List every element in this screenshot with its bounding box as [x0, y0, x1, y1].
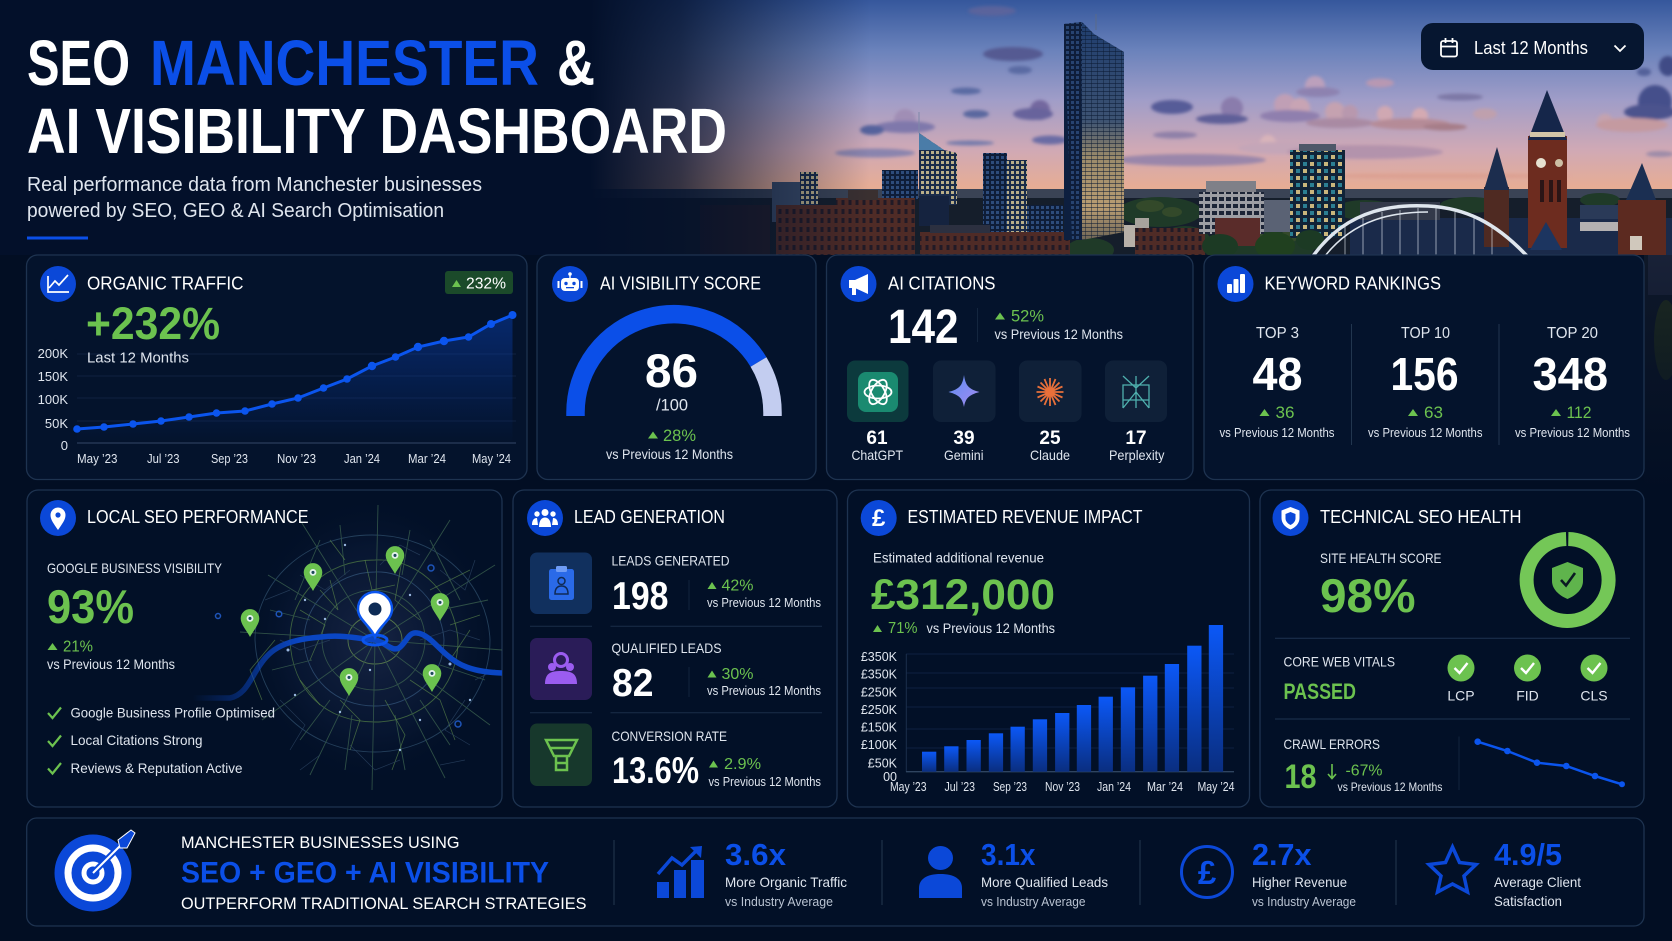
metric: qualified leads: [530, 638, 821, 705]
check: CLS: CLS: [1580, 688, 1608, 704]
Beetham tower: [1064, 14, 1124, 240]
panel: keyword rankings: [1204, 255, 1644, 480]
text: outperform: OUTPERFORM TRADITIONAL SEARCH STRATEGIES: [181, 894, 586, 913]
icon: clipboard: [549, 566, 574, 600]
tile: Claude: 25: [1039, 428, 1061, 449]
metric: conversion rate: [530, 724, 821, 791]
line chart: traffic: 150K: [38, 369, 68, 384]
panel: summary banner: [27, 818, 1644, 926]
metric: qualified leads: 82: [612, 662, 654, 705]
metric: qualified leads: QUALIFIED LEADS: [612, 640, 722, 656]
metric: top 10: 156: [1390, 348, 1458, 400]
icon: pound: £: [872, 505, 886, 532]
stat: client satisfaction: [1429, 837, 1581, 909]
bar chart: revenue: May ’23: [890, 780, 927, 794]
metric: top 20: 348: [1532, 348, 1608, 400]
line chart: traffic: May ’23: [77, 451, 118, 466]
comparison note: vs Previous 12 Months: [47, 656, 175, 672]
stat: client satisfaction: Average Client: [1494, 874, 1581, 890]
comparison note: vs Previous 12 Months: [606, 446, 733, 462]
checklist: Google Business Profile Optimised: [70, 704, 275, 720]
line chart: traffic: Sep ’23: [211, 451, 248, 466]
bar chart: revenue: Mar ’24: [1147, 780, 1183, 794]
heading: organic traffic: ORGANIC TRAFFIC: [87, 274, 244, 294]
distance and ground: [590, 189, 1672, 200]
metric: qualified leads: 30%: [722, 666, 754, 683]
metric: qualified leads: vs Previous 12 Months: [707, 684, 821, 698]
metric: leads generated: LEADS GENERATED: [612, 553, 730, 569]
comparison note: vs Previous 12 Months: [994, 326, 1123, 342]
change: 71%: vs Previous 12 Months: [926, 620, 1055, 636]
metric: top 10: 63: [1424, 403, 1443, 422]
icon: robot: [552, 266, 588, 302]
check: FID: FID: [1516, 688, 1539, 704]
title: &: [557, 27, 595, 99]
label: additional revenue: Estimated additional revenue: [873, 550, 1044, 566]
icon: person: [919, 846, 962, 898]
stat: qualified leads multiple: 3.1x: [981, 837, 1036, 872]
date range selector: Last 12 Months: [1474, 38, 1588, 58]
metric: top 3: 48: [1252, 348, 1302, 400]
tile: Perplexity: Perplexity: [1109, 447, 1164, 463]
stat: organic traffic multiple: 3.6x: [725, 837, 787, 872]
icon: pound circle: [1182, 846, 1232, 898]
tile: ChatGPT: [847, 360, 908, 463]
heading: AI visibility score: AI VISIBILITY SCORE: [600, 274, 761, 294]
sparkline: crawl errors: [1474, 738, 1625, 787]
panel: technical SEO health: [1260, 490, 1644, 807]
stat: organic traffic multiple: vs Industry Average: [725, 895, 833, 909]
metric: top 3: vs Previous 12 Months: [1220, 426, 1334, 440]
bar chart: revenue: Sep ’23: [993, 780, 1027, 794]
crawl errors: 18: [1284, 758, 1316, 796]
metric: conversion rate: vs Previous 12 Months: [708, 775, 821, 789]
date range selector: [1421, 23, 1644, 70]
line chart: traffic: 50K: [45, 416, 68, 431]
bar chart: revenue: Nov ’23: [1045, 780, 1080, 794]
icon: pound circle: £: [1198, 854, 1217, 891]
tile: Claude: Claude: [1030, 447, 1070, 463]
title: AI VISIBILITY DASHBOARD: [27, 95, 727, 167]
change: 71%: 71%: [888, 620, 918, 637]
heading: estimated revenue impact: ESTIMATED REVENUE IMPACT: [908, 507, 1143, 527]
panel: AI citations: [826, 255, 1193, 480]
clouds: [835, 6, 1672, 178]
title: [27, 27, 727, 167]
line chart: traffic: Jan ’24: [344, 451, 380, 466]
stat: qualified leads multiple: More Qualified Leads: [981, 874, 1108, 890]
icon: people purple: [545, 654, 577, 684]
tile: Perplexity: [1105, 360, 1167, 463]
subtitle: Real performance data from Manchester businesses: [27, 173, 482, 196]
line chart: traffic: Mar ’24: [408, 451, 446, 466]
heading: local SEO performance: LOCAL SEO PERFORMANCE: [87, 507, 308, 527]
bar chart: revenue: £250K: [861, 686, 898, 700]
metric: conversion rate: 13.6%: [612, 750, 699, 791]
core web vitals: CORE WEB VITALS: [1284, 654, 1395, 670]
change: 28%: 28%: [663, 426, 696, 445]
heading: keyword rankings: KEYWORD RANKINGS: [1264, 274, 1441, 294]
metric: top 3: 36: [1276, 403, 1294, 422]
tile: Gemini: 39: [953, 428, 975, 449]
subtitle: powered by SEO, GEO & AI Search Optimisation: [27, 199, 444, 222]
icon: calendar: [1441, 38, 1457, 56]
stat: qualified leads multiple: [919, 837, 1108, 909]
metric: top 20: 112: [1566, 403, 1592, 422]
stat: organic traffic multiple: More Organic Traffic: [725, 874, 847, 890]
river: [193, 633, 502, 698]
metric: top 3: [1220, 325, 1334, 440]
icon: rising bars: [657, 846, 704, 898]
metric: top 10: [1368, 325, 1482, 440]
badge: 232%: [445, 271, 513, 294]
stat: revenue multiple: 2.7x: [1252, 837, 1312, 872]
buildings right with clock tower: [1350, 90, 1672, 256]
bar chart: revenue: May ’24: [1198, 780, 1235, 794]
metric: top 20: TOP 20: [1547, 325, 1598, 342]
title: MANCHESTER: [150, 27, 539, 99]
text: manchester businesses: MANCHESTER BUSINESSES USING: [181, 833, 460, 852]
icon: star: [1429, 847, 1476, 892]
change: 52%: [995, 307, 1044, 326]
metric: top 3: TOP 3: [1256, 325, 1299, 342]
gauge: 86 of 100: [575, 314, 773, 416]
icon: shield: [1272, 500, 1308, 536]
big stat: +232%: +232%: [86, 298, 220, 349]
line chart: traffic: 0: [61, 438, 68, 453]
line chart: traffic: Jul ’23: [147, 451, 180, 466]
icon: pound: [861, 500, 897, 536]
right strip below the skyline: [1644, 255, 1672, 495]
badge: 232%: 232%: [466, 275, 506, 292]
metric: top 20: [1515, 325, 1630, 440]
line chart: traffic: [38, 311, 516, 466]
stat: revenue multiple: Higher Revenue: [1252, 874, 1347, 890]
stat: qualified leads multiple: vs Industry Average: [981, 895, 1086, 909]
big stat: 142: 142: [888, 301, 958, 354]
stat: organic traffic multiple: [657, 837, 847, 909]
icon: megaphone: [840, 266, 876, 302]
icon: funnel: [546, 740, 577, 770]
tile: Claude: [1019, 360, 1082, 463]
metric: conversion rate: CONVERSION RATE: [612, 728, 727, 744]
core web vitals: [1284, 654, 1608, 704]
title: SEO: [27, 27, 130, 99]
crawl errors: vs Previous 12 Months: [1338, 780, 1442, 794]
metric: top 10: vs Previous 12 Months: [1368, 426, 1482, 440]
heading: lead generation: LEAD GENERATION: [574, 507, 725, 527]
icon: bars: [1218, 266, 1254, 302]
change: 71%: [873, 620, 1055, 637]
metric: top 20: vs Previous 12 Months: [1515, 426, 1630, 440]
line chart: traffic: May ’24: [472, 451, 511, 466]
bar chart: revenue: Jul ’23: [944, 780, 975, 794]
text: SEO + GEO + AI visibility: SEO + GEO + AI VISIBILITY: [181, 857, 549, 890]
line chart: traffic: 100K: [38, 392, 68, 407]
heading: technical SEO health: TECHNICAL SEO HEALTH: [1320, 507, 1522, 527]
crawl errors: [1284, 736, 1625, 796]
gauge: 86 of 100: 86: [645, 344, 698, 397]
metric: leads generated: 42%: [722, 578, 754, 595]
line chart: traffic: Nov ’23: [277, 451, 316, 466]
panel: organic traffic: [26, 255, 527, 480]
icon: location pin: [40, 500, 76, 536]
metric: conversion rate: 2.9%: [724, 756, 761, 773]
label: site health score: SITE HEALTH SCORE: [1320, 550, 1442, 566]
map pins: [241, 546, 449, 696]
icon: target with arrow: [54, 830, 135, 912]
big stat: 98%: 98%: [1320, 569, 1416, 622]
check: CLS: [1580, 654, 1608, 704]
change: 21%: 21%: [63, 639, 93, 656]
metric: top 10: TOP 10: [1401, 325, 1450, 342]
bar chart: revenue: [861, 625, 1235, 794]
change: 28%: [648, 426, 696, 445]
line chart: traffic: 200K: [38, 346, 68, 361]
icon: line chart: [40, 266, 76, 302]
stat: client satisfaction: Satisfaction: [1494, 893, 1562, 909]
checklist: [48, 704, 275, 776]
map: Manchester roads: [193, 495, 502, 790]
tile: Perplexity: 17: [1125, 428, 1147, 449]
bar chart: revenue: £50K: [868, 757, 898, 771]
bar chart: revenue: Jan ’24: [1097, 780, 1131, 794]
donut: health score: [1526, 538, 1609, 622]
bar chart: revenue: £100K: [861, 738, 898, 752]
big stat: 93%: 93%: [47, 580, 134, 633]
panel: lead generation: [513, 490, 837, 807]
metric: leads generated: 198: [612, 575, 668, 618]
stat: revenue multiple: [1182, 837, 1356, 909]
core web vitals: PASSED: [1284, 679, 1356, 704]
icon: people: [527, 500, 563, 536]
tile: Gemini: [933, 360, 996, 463]
white arch bridge: [1313, 206, 1527, 256]
period label: Last 12 Months: [87, 350, 189, 366]
left fade over the photo: [589, 0, 871, 256]
change: 52%: 52%: [1011, 307, 1044, 326]
heading: AI citations: AI CITATIONS: [888, 274, 996, 294]
panel: estimated revenue impact: [848, 490, 1250, 807]
bar chart: revenue: £250K: [861, 703, 898, 717]
buildings left: [700, 112, 1070, 256]
bar chart: revenue: £350K: [861, 650, 898, 664]
subtitle: [27, 173, 482, 240]
change: 21%: [48, 639, 93, 656]
check: LCP: LCP: [1447, 688, 1475, 704]
label: Google Business visibility: GOOGLE BUSINESS VISIBILITY: [47, 560, 223, 576]
gauge: 86 of 100: /100: [656, 396, 688, 414]
metric: leads generated: vs Previous 12 Months: [707, 596, 821, 610]
big stat: £312,000: £312,000: [871, 571, 1055, 619]
stat: revenue multiple: vs Industry Average: [1252, 895, 1356, 909]
crawl errors: CRAWL ERRORS: [1284, 736, 1380, 752]
panel: AI visibility score: [537, 255, 816, 480]
panel: local SEO performance: [27, 490, 502, 807]
check: LCP: [1447, 654, 1475, 704]
crawl errors: -67%: [1346, 763, 1382, 780]
tile: Gemini: Gemini: [944, 447, 984, 463]
bar chart: revenue: 00: [883, 770, 897, 784]
buildings centre: [1124, 144, 1345, 260]
checklist: Local Citations Strong: [70, 732, 202, 748]
checklist: Reviews & Reputation Active: [70, 760, 243, 776]
check: FID: [1514, 654, 1541, 704]
tile: ChatGPT: 61: [866, 428, 888, 449]
stat: client satisfaction: 4.9/5: [1494, 837, 1562, 872]
metric: leads generated: [530, 552, 821, 618]
bar chart: revenue: £350K: [861, 668, 898, 682]
tile: ChatGPT: ChatGPT: [852, 447, 903, 463]
bar chart: revenue: £150K: [861, 721, 898, 735]
